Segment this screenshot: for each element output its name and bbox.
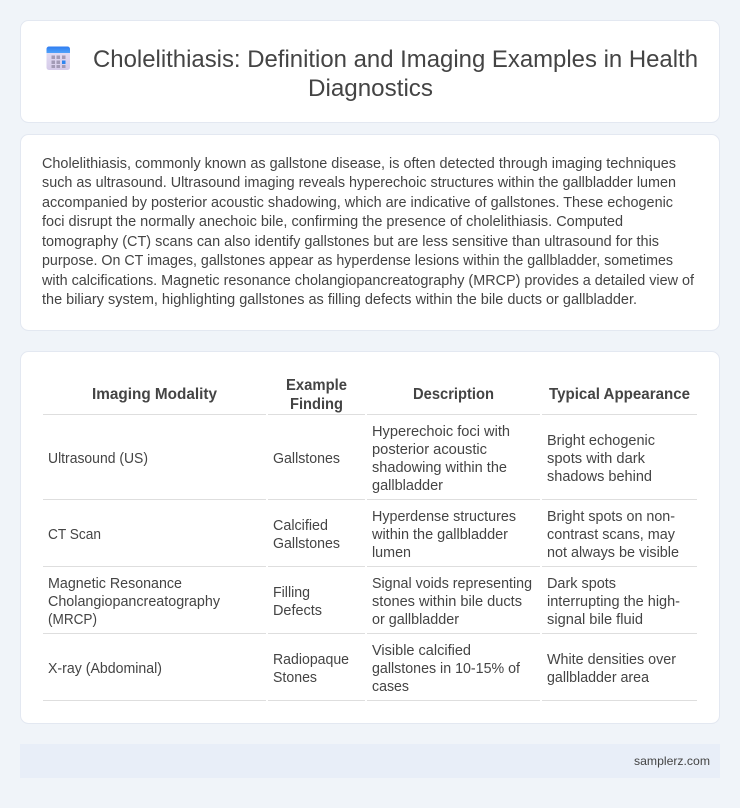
text block: definition: Cholelithiasis, commonly known as gallstone disease, is often detected through imaging techniques [42,156,676,172]
table row: ultrasound: shadowing within the [372,460,507,476]
table row: X-ray: cases [372,679,409,695]
table row: X-ray: White densities over [547,652,676,668]
table row: MRCP: Magnetic Resonance [48,576,182,592]
text block: definition: tomography (CT) scans can also identify gallstones but are less sensitive than ultrasound for this [42,234,659,250]
table row: X-ray: X-ray (Abdominal) [48,661,162,677]
table header row: Finding [290,396,343,413]
text block: definition: purpose. On CT images, gallstones appear as hyperdense lesions within the gallbladder, sometimes [42,253,673,269]
table row: ultrasound: shadows behind [547,469,652,485]
table row: MRCP: or gallbladder [372,612,459,628]
title: Cholelithiasis: Definition and Imaging Examples in Health [93,46,698,73]
table header row: Example [286,377,347,394]
table row: MRCP: stones within bile ducts [372,594,522,610]
table row: ultrasound: Hyperechoic foci with [372,424,510,440]
title: Diagnostics [308,75,433,102]
text block: definition: the biliary system, highlighting gallstones as filling defects within the bile ducts or gallbladder. [42,292,637,308]
table row: ultrasound: posterior acoustic [372,442,487,458]
table row: MRCP: Filling [273,585,310,601]
table row: CT scan: CT Scan [48,527,101,543]
title [93,46,698,102]
table row: X-ray: Stones [273,670,317,686]
footer: samplerz.com [634,754,710,768]
footer [20,744,720,778]
table row: CT scan: not always be visible [547,545,679,561]
table row: ultrasound: Gallstones [273,451,340,467]
text block: definition: with calcifications. Magnetic resonance cholangiopancreatography (MRCP) provides a detailed view of [41,273,695,289]
table header row: Description [413,386,494,403]
table row: ultrasound: gallbladder [372,478,443,494]
table row: CT scan: within the gallbladder [371,527,508,543]
table row: CT scan [43,509,697,566]
panel: title header [20,20,720,122]
table row: CT scan: Bright spots on non- [547,509,675,525]
table row: CT scan: Calcified [273,518,328,534]
table row: CT scan: contrast scans, may [547,527,676,543]
table row: ultrasound [43,424,697,500]
table row: CT scan: Gallstones [273,536,340,552]
text block: definition [41,156,695,308]
panel: imaging table [20,352,720,724]
table row: ultrasound: Ultrasound (US) [48,451,148,467]
table row: MRCP [43,576,697,634]
table row: MRCP: Defects [273,603,322,619]
table header row [43,377,697,414]
table row: CT scan: Hyperdense structures [372,509,516,525]
text block: definition: accompanied by posterior acoustic shadowing, which are indicative of gallstones. These echogenic [42,195,673,211]
table row: X-ray: gallstones in 10-15% of [372,661,521,677]
table header row: Typical Appearance [549,386,690,403]
table row: MRCP: Dark spots [547,576,616,592]
panel: introduction paragraph [20,134,720,330]
table row: X-ray: Visible calcified [372,643,471,659]
table row: MRCP: interrupting the high- [547,594,680,610]
table row: MRCP: Signal voids representing [372,576,532,592]
table row: X-ray: Radiopaque [273,652,349,668]
table row: MRCP: signal bile fluid [547,612,643,628]
table row: MRCP: Cholangiopancreatography [48,594,221,610]
table row: MRCP: (MRCP) [48,612,97,628]
table row: ultrasound: spots with dark [547,451,646,467]
table row: X-ray: gallbladder area [547,670,649,686]
table header row: Imaging Modality [92,386,217,403]
text block: definition: foci disrupt the normally anechoic bile, confirming the presence of cholelithiasis. Computed [42,214,623,230]
table row: ultrasound: Bright echogenic [547,433,655,449]
table row: X-ray [43,643,697,700]
icon: calendar [46,46,70,70]
table row: CT scan: lumen [372,545,411,561]
text block: definition: such as ultrasound. Ultrasound imaging reveals hyperechoic structures within the gallbladder lumen [42,175,676,191]
